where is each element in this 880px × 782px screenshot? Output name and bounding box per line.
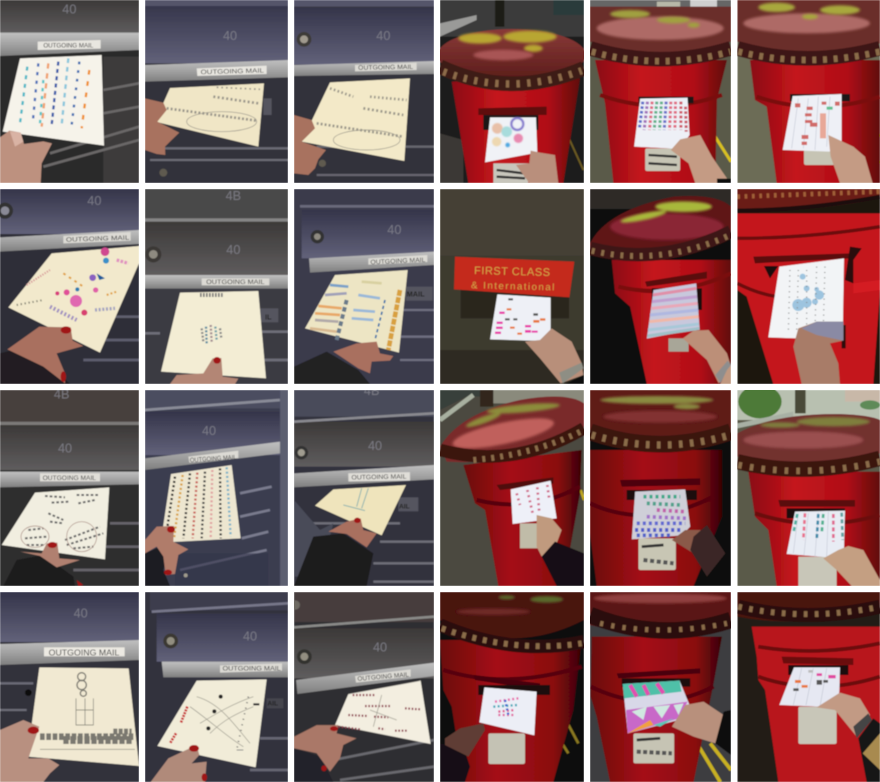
hand <box>683 330 731 383</box>
hand <box>7 327 83 383</box>
postbox body <box>590 450 722 586</box>
hand <box>672 702 724 743</box>
photo: mailbox card 6 <box>294 189 434 384</box>
sleeve <box>3 555 75 586</box>
hand <box>294 725 357 772</box>
postbox body <box>440 640 582 782</box>
postcard <box>623 681 690 733</box>
sleeve <box>690 525 725 577</box>
photo: mailbox card 7: 4B <box>54 387 69 401</box>
photo: postbox card 5 <box>737 189 880 384</box>
postcard <box>479 687 537 735</box>
hand <box>672 530 717 553</box>
postcard <box>485 117 537 162</box>
photo: mailbox card 3: 40 <box>376 29 390 43</box>
postbox body <box>463 450 582 586</box>
photo: mailbox card 5: IL <box>265 312 272 321</box>
postbox cap <box>737 0 880 60</box>
hand <box>537 515 562 557</box>
photo: mailbox card 6: 40 <box>387 223 401 237</box>
photo: mailbox card 5: OUTGOING MAIL <box>206 279 265 286</box>
postcard <box>155 83 264 147</box>
postcard <box>779 667 840 707</box>
sign <box>454 257 574 297</box>
postcard <box>157 679 267 767</box>
hand <box>145 526 188 575</box>
photo: postbox card 11 <box>737 592 880 782</box>
postcard <box>305 270 408 353</box>
photo: mailbox card 9: AIL <box>399 503 410 510</box>
sleeve <box>0 350 70 384</box>
postbox cap <box>590 592 731 634</box>
hand <box>0 131 52 183</box>
hand <box>328 518 377 547</box>
postbox body <box>748 472 880 586</box>
sleeve <box>542 542 584 586</box>
photo: mailbox card 9: 4B <box>364 384 379 398</box>
hand <box>525 328 583 383</box>
photo: mailbox card 7: OUTGOING MAIL <box>43 475 96 482</box>
photo: postbox card 6 <box>440 390 584 586</box>
sleeve <box>294 533 373 586</box>
postcard <box>634 98 690 149</box>
postcard <box>27 667 139 766</box>
postcard <box>315 485 406 535</box>
photo: mailbox card 1 <box>0 0 139 183</box>
postcard <box>2 487 109 559</box>
postcard <box>783 94 842 152</box>
photo: mailbox card 4: OUTGOING MAIL <box>66 235 130 244</box>
photo: mailbox card 9 <box>294 384 434 586</box>
postcard <box>787 511 845 558</box>
sign: & International <box>471 280 555 293</box>
photo: mailbox card 7: 40 <box>58 442 72 456</box>
photo: mailbox card 11 <box>145 592 288 782</box>
hand <box>333 342 393 373</box>
hand <box>145 98 179 155</box>
postbox body <box>750 60 880 183</box>
photo: mailbox card 1: OUTGOING MAIL <box>43 42 94 49</box>
postcard <box>647 283 700 339</box>
photo: mailbox card 6: MAIL <box>407 290 425 299</box>
postcard <box>161 465 241 543</box>
sleeve <box>858 718 880 782</box>
photo: mailbox card 12 <box>294 592 434 782</box>
postbox body <box>737 213 880 384</box>
photo: mailbox card 1: 40 <box>62 2 76 16</box>
hand <box>0 720 59 782</box>
photo: mailbox card 2: OUTGOING MAIL <box>201 67 265 76</box>
photo: postbox card 1 <box>440 0 584 183</box>
photo: postbox card 9 <box>440 592 584 782</box>
postcard <box>511 481 557 524</box>
sleeve <box>294 748 333 782</box>
photo: postbox card 7 <box>590 390 731 586</box>
photo: mailbox card 11: 40 <box>243 630 257 644</box>
photo: mailbox card 6: OUTGOING MAIL <box>370 257 426 266</box>
photo: postbox card 10 <box>590 592 731 782</box>
postbox cap <box>590 7 731 61</box>
postcard <box>3 55 104 146</box>
sign: FIRST CLASS <box>474 265 550 279</box>
photo: postbox card 8 <box>737 390 880 586</box>
postcard <box>8 246 139 353</box>
photo: mailbox card 10: 40 <box>74 606 88 620</box>
photo: mailbox card 10: OUTGOING MAIL <box>49 648 120 657</box>
photo: mailbox card 10 <box>0 592 139 782</box>
hand <box>793 322 843 384</box>
postbox body <box>752 627 880 782</box>
postbox cap <box>440 397 584 462</box>
photo: mailbox card 7 <box>0 387 139 586</box>
hand <box>170 358 238 384</box>
photo: mailbox card 8: OUTGOING MAIL <box>190 454 237 464</box>
photo: mailbox card 5: 40 <box>226 243 240 257</box>
photo: mailbox card 11: OUTGOING MAIL <box>222 666 281 673</box>
postbox body <box>591 637 722 782</box>
photo: mailbox card 5 <box>145 189 288 384</box>
sleeve <box>440 743 470 782</box>
postbox cap <box>438 29 586 84</box>
postcard <box>335 681 431 744</box>
postcard <box>768 258 844 340</box>
photo: mailbox card 12: OUTGOING MAIL <box>357 671 410 683</box>
postcard <box>490 294 551 341</box>
postbox body <box>595 60 727 183</box>
postbox cap <box>737 414 880 471</box>
hand <box>817 693 870 737</box>
hand <box>516 151 558 183</box>
postcard <box>302 78 410 161</box>
photo: mailbox card 2 <box>145 0 288 183</box>
postbox body <box>612 260 731 384</box>
photo: postbox card 3 <box>737 0 880 183</box>
photo: mailbox card 8 <box>145 390 288 586</box>
sleeve <box>294 352 370 384</box>
hand <box>671 135 727 183</box>
hand <box>151 745 207 782</box>
postcard <box>161 291 266 378</box>
postbox cap <box>737 592 880 622</box>
postbox body <box>452 78 580 183</box>
photo: mailbox card 3: OUTGOING MAIL <box>358 64 414 72</box>
photo: mailbox card 8: 40 <box>202 424 216 438</box>
sleeve <box>715 710 731 755</box>
hand <box>828 135 873 183</box>
photo: mailbox card 9: OUTGOING MAIL <box>351 474 407 481</box>
photo: first class slot <box>440 189 584 384</box>
photo: mailbox card 11: AIL <box>267 700 278 707</box>
photo: mailbox card 4 <box>0 189 139 384</box>
hand <box>294 115 326 175</box>
hand <box>823 546 880 586</box>
photo: mailbox card 2: 40 <box>223 29 237 43</box>
postcard <box>632 489 690 539</box>
postbox cap <box>590 196 731 256</box>
photo: mailbox card 9: 40 <box>368 439 382 453</box>
postbox cap <box>590 390 731 445</box>
postbox cap <box>737 189 880 211</box>
hand <box>445 723 485 757</box>
photo: postbox card 4 <box>590 189 731 384</box>
sleeve <box>145 547 170 586</box>
postbox cap <box>440 592 584 646</box>
photo: mailbox card 4: 40 <box>87 194 101 208</box>
photo: mailbox card 3 <box>294 0 434 183</box>
photo: postbox card 2 <box>590 0 731 183</box>
photo: mailbox card 12: 40 <box>373 641 387 655</box>
hand <box>20 543 80 567</box>
photo: mailbox card 5: 4B <box>226 189 241 203</box>
